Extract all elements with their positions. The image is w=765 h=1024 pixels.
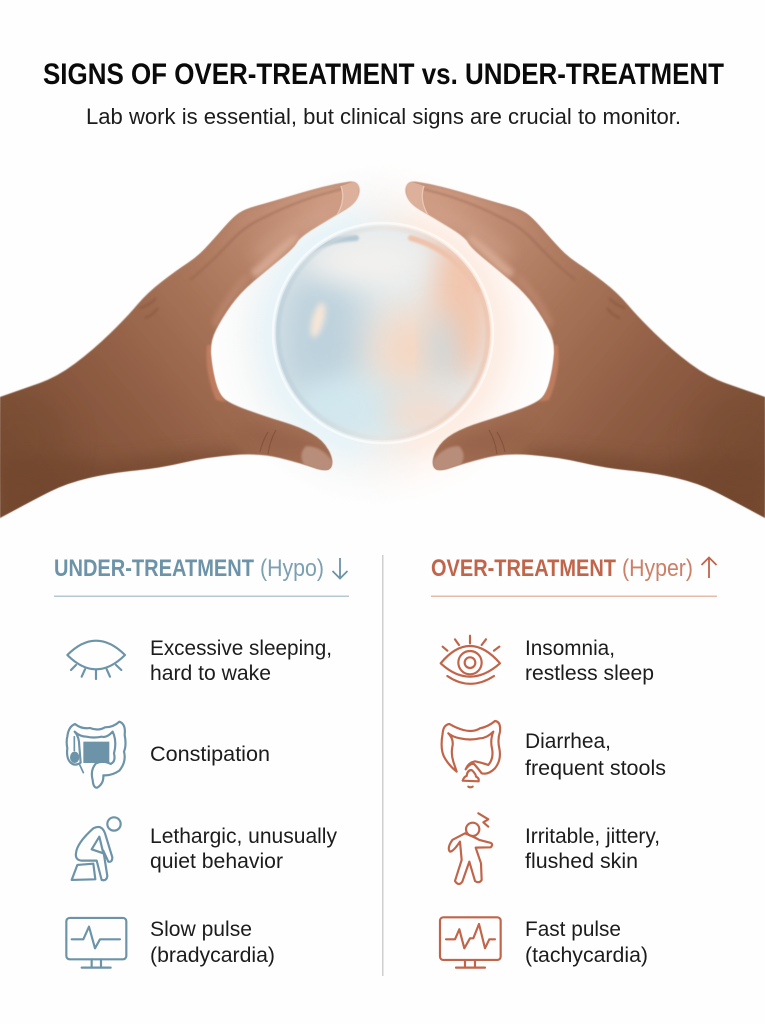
heading: under-treatment: UNDER-TREATMENT	[54, 555, 254, 582]
glow behind sphere	[241, 192, 526, 478]
icon: closed eye	[67, 641, 125, 679]
label: fast pulse: Fast pulse	[525, 918, 621, 941]
label: diarrhea: frequent stools	[525, 757, 666, 780]
label: irritable: flushed skin	[525, 850, 638, 873]
icon: monitor with slow pulse	[66, 918, 126, 968]
icon: blocked colon	[67, 722, 126, 788]
right hand	[405, 178, 765, 530]
label: irritable: Irritable, jittery,	[525, 825, 660, 848]
icon: agitated person	[449, 813, 492, 884]
icon: colon with stool	[442, 721, 500, 787]
center divider	[382, 555, 384, 976]
label: insomnia: Insomnia,	[525, 637, 615, 660]
heading: over-treatment: (Hyper)	[622, 555, 693, 582]
illustration: hands holding a glass sphere	[0, 155, 765, 530]
heading: over-treatment: OVER-TREATMENT	[431, 555, 616, 582]
glass sphere	[273, 220, 493, 443]
label: lethargic: Lethargic, unusually	[150, 825, 337, 848]
label: slow pulse: Slow pulse	[150, 918, 252, 941]
label: fast pulse: (tachycardia)	[525, 944, 648, 967]
label: constipation: Constipation	[150, 743, 270, 766]
label: excessive sleeping: hard to wake	[150, 662, 271, 685]
panel: under-treatment	[54, 555, 349, 968]
label: diarrhea: Diarrhea,	[525, 730, 611, 753]
icon: monitor with fast pulse	[440, 917, 501, 968]
label: lethargic: quiet behavior	[150, 850, 283, 873]
heading: under-treatment: (Hypo)	[260, 555, 324, 582]
label: slow pulse: (bradycardia)	[150, 944, 275, 967]
label: insomnia: restless sleep	[525, 662, 654, 685]
panel: over-treatment	[431, 555, 717, 968]
icon: wide-open eye	[441, 636, 500, 684]
icon: slumped seated person	[72, 817, 121, 880]
subtitle: Lab work is essential, but clinical signs are crucial to monitor.	[86, 104, 681, 129]
left hand	[0, 178, 360, 530]
label: excessive sleeping: Excessive sleeping,	[150, 637, 332, 660]
